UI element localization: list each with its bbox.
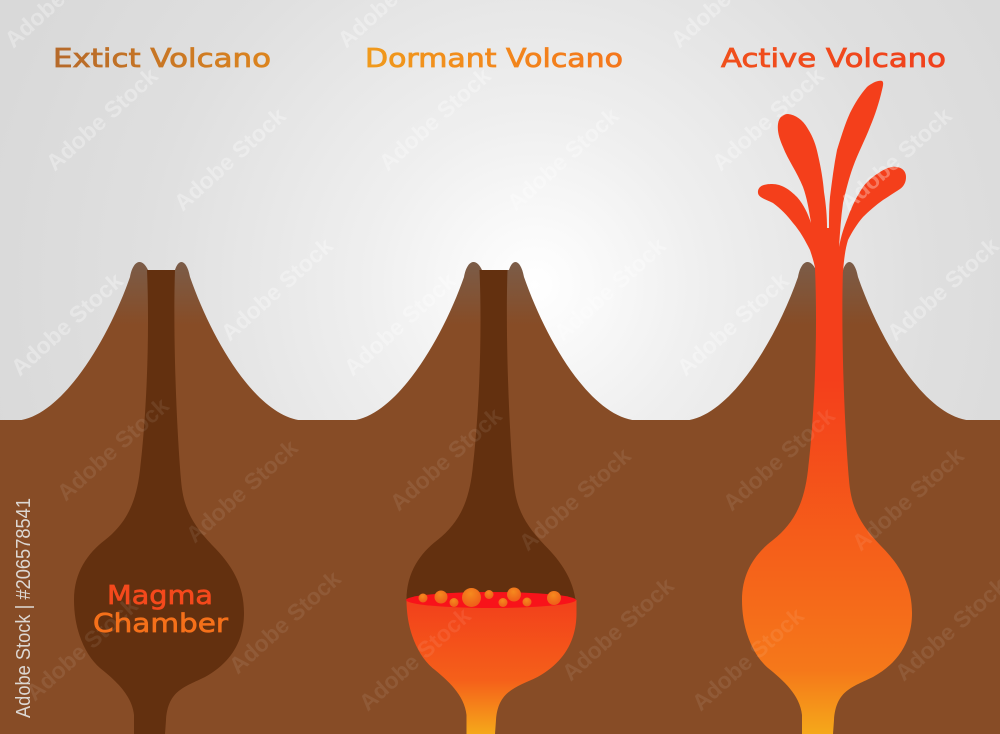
watermark pattern on ground: Adobe Stock (687, 602, 809, 716)
extinct conduit and empty chamber (74, 270, 244, 734)
watermark pattern on sky: Adobe Stock (835, 102, 957, 216)
watermark pattern on sky (0, 0, 1000, 381)
watermark pattern on sky: Adobe Stock (374, 62, 496, 176)
watermark pattern on ground: Adobe Stock (21, 592, 143, 706)
watermark pattern on sky: Adobe Stock (41, 62, 163, 176)
panel: dormant volcano (352, 262, 636, 734)
heading: active volcano: Active Volcano (721, 44, 946, 74)
watermark pattern on sky: Adobe Stock (216, 232, 338, 346)
label: magma chamber: Magma (107, 581, 213, 611)
watermark pattern on ground: Adobe Stock (181, 434, 303, 548)
watermark pattern on ground: Adobe Stock (354, 602, 476, 716)
watermark pattern on sky: Adobe Stock (339, 267, 461, 381)
label: magma chamber (93, 581, 228, 639)
extinct volcano mountain (18, 262, 302, 420)
dormant magma pool (406, 600, 576, 734)
watermark pattern on ground: Adobe Stock (224, 565, 346, 679)
dormant conduit and chamber (406, 270, 576, 599)
watermark pattern on sky: Adobe Stock (502, 102, 624, 216)
watermark pattern on ground: Adobe Stock (557, 572, 679, 686)
label: magma chamber: Chamber (93, 609, 228, 639)
heading: extinct volcano: Extict Volcano (53, 44, 271, 74)
stock id vertical text: Adobe Stock | #206578541 (13, 498, 35, 718)
watermark pattern on ground: Adobe Stock (718, 402, 840, 516)
lava eruption jets (758, 81, 906, 272)
panel: active volcano (686, 81, 970, 734)
magma bubbles (418, 588, 561, 607)
active conduit and chamber filled with magma (742, 268, 912, 734)
dormant volcano mountain (352, 262, 636, 420)
dormant magma surface (406, 592, 576, 608)
watermark pattern on ground (21, 392, 1000, 716)
active volcano mountain (686, 262, 970, 420)
watermark pattern on sky: Adobe Stock (549, 232, 671, 346)
watermark pattern on sky: Adobe Stock (6, 267, 128, 381)
watermark pattern on ground: Adobe Stock (385, 402, 507, 516)
watermark pattern on sky: Adobe Stock (882, 232, 1000, 346)
watermark pattern on ground: Adobe Stock (514, 442, 636, 556)
heading: dormant volcano: Dormant Volcano (365, 44, 623, 74)
watermark pattern on sky: Adobe Stock (707, 62, 829, 176)
watermark pattern on sky: Adobe Stock (672, 267, 794, 381)
panel: extinct volcano (18, 262, 302, 734)
ground (0, 420, 1000, 734)
watermark pattern on ground: Adobe Stock (52, 392, 174, 506)
watermark pattern on ground: Adobe Stock (847, 442, 969, 556)
watermark pattern on sky: Adobe Stock (169, 102, 291, 216)
